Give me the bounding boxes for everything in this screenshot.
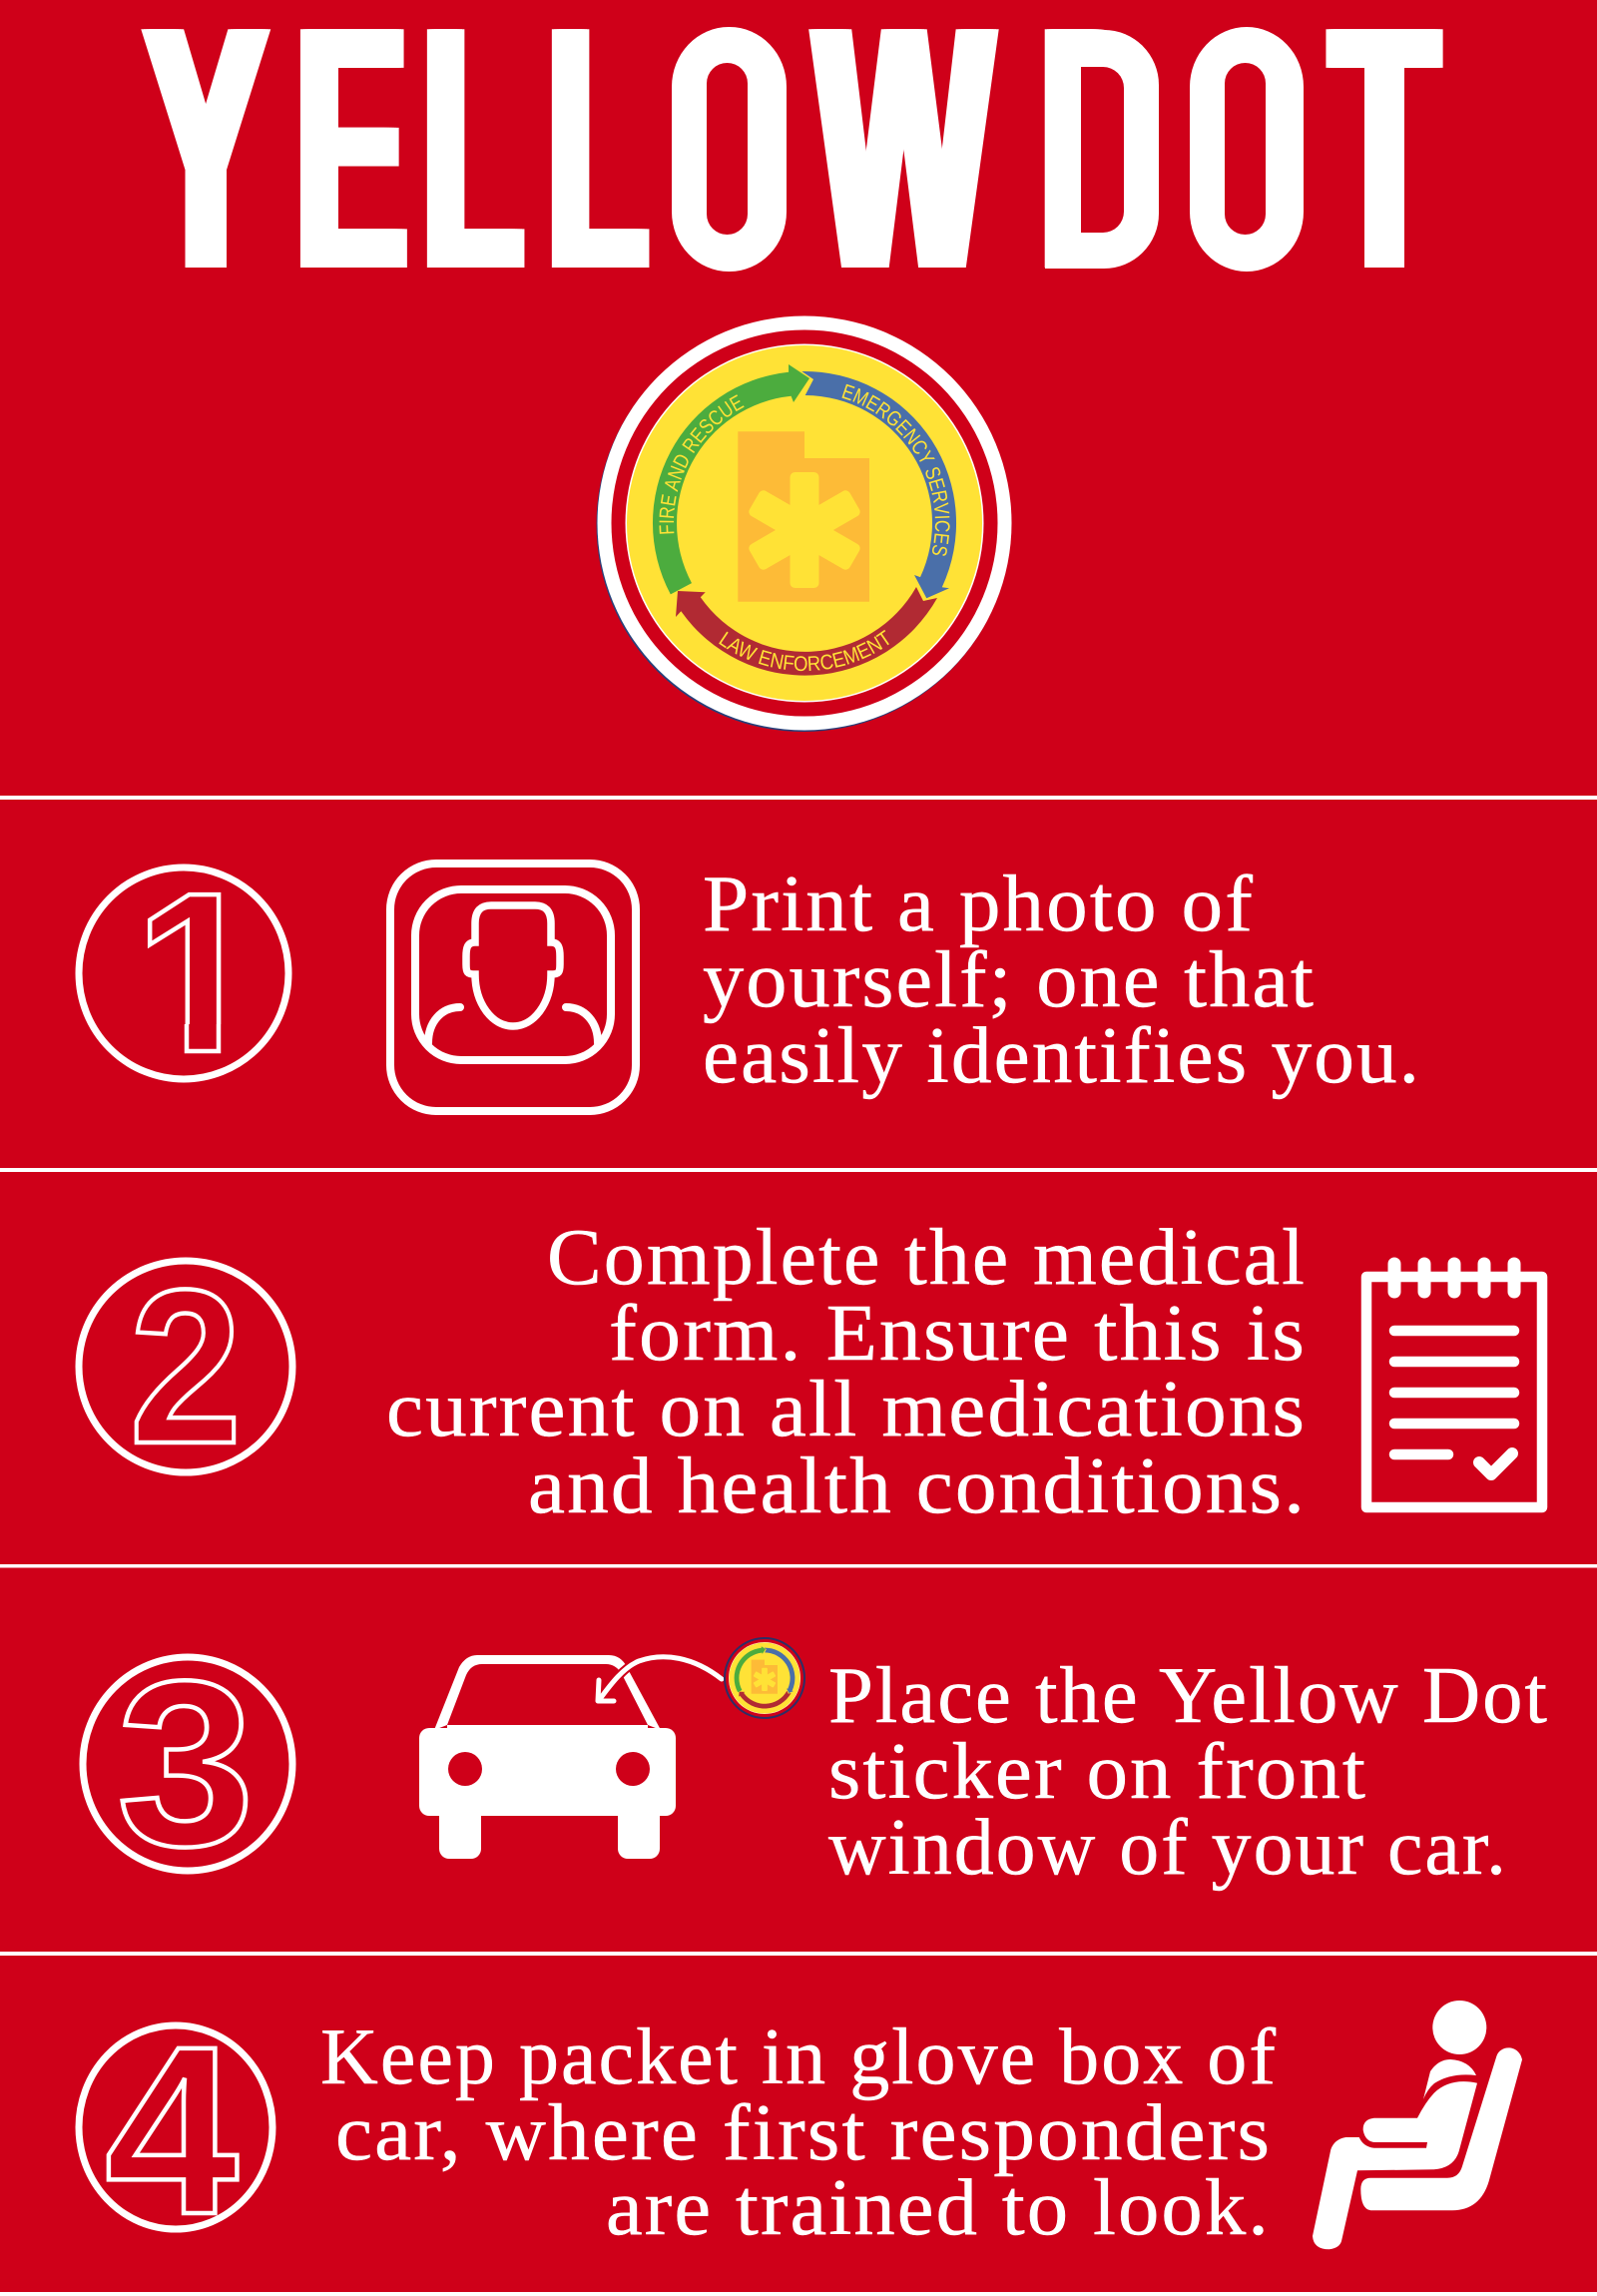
arrow: sticker to windshield [598, 1657, 722, 1701]
number 2 in circle [79, 1244, 292, 1489]
title: Yellow Dot [141, 0, 1443, 341]
step 1 text: yourself; one that [703, 936, 1316, 1024]
divider [0, 1564, 1597, 1567]
arrow label: emergency services: EMERGENCY SERVICES [842, 383, 950, 556]
step 2 text: current on all medications [386, 1366, 1307, 1453]
icon: portrait photo [390, 863, 636, 1111]
step 2 text: and health conditions. [528, 1442, 1307, 1530]
step 1 text [703, 861, 1421, 1100]
step 1 text: easily identifies you. [703, 1012, 1421, 1100]
number 4 in circle [79, 1997, 272, 2264]
step 4 text: are trained to look. [606, 2164, 1271, 2252]
step 4 text: Keep packet in glove box of [320, 2013, 1278, 2101]
step 3 text: Place the Yellow Dot [828, 1652, 1549, 1740]
divider [0, 796, 1597, 800]
step 4 text [320, 2013, 1278, 2252]
panel: step 4 [79, 1997, 1522, 2264]
panel: step 2 [79, 1214, 1542, 1530]
step 3 text [828, 1652, 1549, 1892]
icon: notepad checklist [1366, 1264, 1542, 1507]
step 2 text [386, 1214, 1307, 1530]
number 1 in circle: 1 [135, 847, 261, 1100]
panel: step 1 [79, 847, 1421, 1111]
bottom white edge [0, 2292, 1597, 2296]
divider [0, 1952, 1597, 1956]
icon: mini yellow dot sticker [725, 1638, 804, 1718]
step 3 text: sticker on front [828, 1728, 1367, 1816]
number 3 in circle: 3 [117, 1632, 255, 1896]
step 4 text: car, where first responders [335, 2089, 1272, 2177]
number 3 in circle [83, 1632, 292, 1896]
icon: seated person with seat belt [1313, 2001, 1522, 2249]
panel: step 3 [83, 1632, 1549, 1896]
icon: car [419, 1655, 676, 1859]
number 1 in circle [76, 864, 291, 1082]
arrow label: law enforcement: LAW ENFORCEMENT [719, 629, 889, 671]
number 2 in circle: 2 [130, 1244, 242, 1489]
badge artwork: Utah map, star of life and three arrows [627, 345, 982, 701]
step 3 text: window of your car. [828, 1804, 1508, 1892]
step 2 text: Complete the medical [547, 1214, 1307, 1302]
arrow label: fire and rescue: FIRE AND RESCUE [659, 394, 745, 534]
number 4 in circle: 4 [105, 1997, 239, 2264]
step 2 text: form. Ensure this is [609, 1290, 1307, 1378]
panel: logo badge [597, 315, 1012, 732]
divider [0, 1168, 1597, 1172]
step 1 text: Print a photo of [703, 861, 1255, 948]
badge rings [597, 315, 1012, 732]
